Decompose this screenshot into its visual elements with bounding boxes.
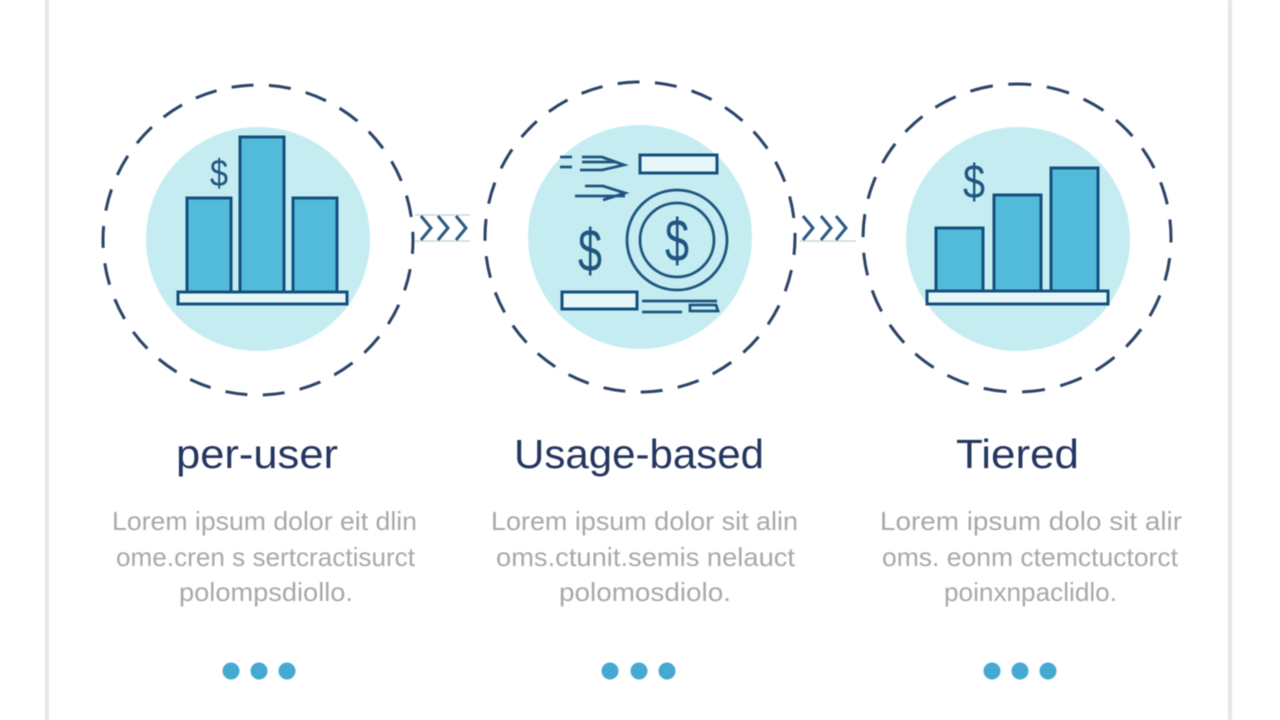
pagination dots: usage-based <box>602 662 676 680</box>
icon: coins and transfers <box>528 125 752 349</box>
pagination dots: per-user <box>222 662 296 680</box>
dashed ring: tiered <box>846 67 1188 409</box>
dashed ring: usage-based <box>481 78 799 396</box>
icon: tiered bar chart <box>906 127 1130 351</box>
panel: usage-based <box>481 78 799 680</box>
dashed ring: per-user <box>95 77 421 403</box>
description: tiered: poinxnpaclidlo. <box>944 577 1117 607</box>
heading: usage-based: Usage-based <box>514 431 764 477</box>
icon: per-user bar chart <box>146 127 370 351</box>
icon: per-user bar chart: $ <box>210 153 228 195</box>
heading: per-user: per-user <box>176 431 338 477</box>
description: tiered <box>880 506 1182 607</box>
description: usage-based <box>491 506 798 607</box>
icon: coins and transfers: $ <box>578 217 602 284</box>
icon: tiered bar chart: $ <box>963 156 985 209</box>
description: per-user: Lorem ipsum dolor eit dlin <box>112 506 417 536</box>
icon: coins and transfers: $ <box>665 207 689 274</box>
panel: per-user <box>95 77 421 680</box>
pagination dots: tiered <box>984 662 1056 680</box>
description: per-user: polompsdiollo. <box>179 577 353 607</box>
description: usage-based: polomosdiolo. <box>559 577 731 607</box>
description: usage-based: Lorem ipsum dolor sit alin <box>491 506 798 536</box>
description: per-user: ome.cren s sertcractisurct <box>116 542 416 572</box>
description: tiered: oms. eonm ctemctuctorct <box>882 542 1179 572</box>
arrow: per-user to usage-based <box>415 215 470 241</box>
panel: tiered <box>846 67 1188 679</box>
description: tiered: Lorem ipsum dolo sit alir <box>880 506 1182 536</box>
description: per-user <box>112 506 417 607</box>
arrow: usage-based to tiered <box>800 216 856 241</box>
heading: tiered: Tiered <box>956 431 1079 477</box>
description: usage-based: oms.ctunit.semis nelauct <box>496 542 796 572</box>
